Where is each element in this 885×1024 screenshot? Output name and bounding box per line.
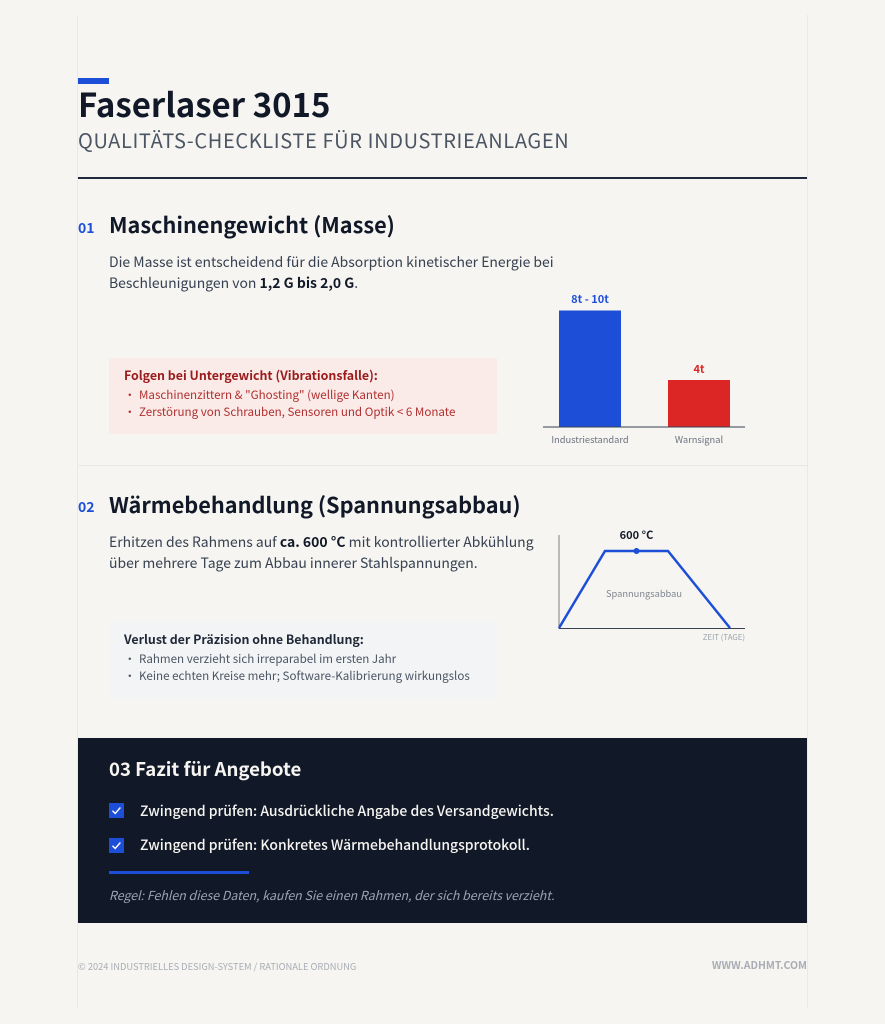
copyright: © 2024 INDUSTRIELLES DESIGN-SYSTEM / RATIONALE ORDNUNG	[78, 959, 356, 973]
item text: Zwingend prüfen: Konkretes Wärmebehandlungsprotokoll.	[140, 835, 530, 855]
callout list: Rahmen verzieht sich irreparabel im ersten Jahr	[139, 651, 396, 667]
callout list	[124, 387, 455, 420]
body text	[109, 532, 534, 573]
value label 4t: 4t	[693, 361, 705, 377]
callout list: Maschinenzittern & "Ghosting" (wellige Kanten)	[139, 387, 395, 403]
callout list: Zerstörung von Schrauben, Sensoren und Optik < 6 Monate	[139, 404, 455, 420]
icon: checkbox	[109, 803, 124, 818]
website: WWW.ADHMT.COM	[712, 958, 807, 973]
line chart: temperature profile	[558, 527, 745, 643]
body text: Die Masse ist entscheidend für die Absorption kinetischer Energie bei	[109, 252, 554, 272]
peak label: 600 °C	[620, 527, 653, 543]
rule note: Regel: Fehlen diese Daten, kaufen Sie einen Rahmen, der sich bereits verzieht.	[109, 886, 555, 904]
temperature curve	[559, 551, 730, 628]
title: Faserlaser 3015	[78, 79, 330, 127]
bar chart: machine weight	[543, 291, 745, 446]
header rule	[78, 177, 807, 179]
section number 02: 02	[78, 497, 95, 517]
body text	[109, 252, 554, 293]
body text: Erhitzen des Rahmens auf ca. 600 °C mit kontrollierter Abkühlung	[109, 532, 534, 552]
section number 01: 01	[78, 218, 95, 238]
checklist item 2	[109, 835, 530, 855]
conclusion heading: 03 Fazit für Angebote	[109, 755, 301, 782]
callout list: ・	[124, 651, 136, 667]
callout list: ・	[124, 668, 136, 684]
callout: loss of precision	[109, 621, 497, 699]
icon: checkbox	[109, 838, 124, 853]
accent bar	[78, 78, 109, 84]
callout heading: Verlust der Präzision ohne Behandlung:	[124, 630, 364, 648]
curve label: Spannungsabbau	[606, 586, 682, 600]
callout list	[124, 651, 470, 684]
panel: section 01 machine weight	[78, 205, 807, 466]
section heading: Maschinengewicht (Masse)	[109, 209, 395, 240]
axis label warning signal: Warnsignal	[675, 432, 723, 446]
item text: Zwingend prüfen: Ausdrückliche Angabe des Versandgewichts.	[140, 801, 554, 821]
footer	[78, 958, 807, 973]
bar: warning signal	[668, 380, 730, 427]
header	[78, 78, 807, 179]
callout list: Keine echten Kreise mehr; Software-Kalibrierung wirkungslos	[139, 668, 470, 684]
body text: Beschleunigungen von 1,2 G bis 2,0 G.	[109, 273, 358, 293]
callout: underweight consequences	[109, 358, 497, 434]
panel: section 02 heat treatment	[78, 488, 534, 684]
blue divider	[109, 871, 248, 874]
body text: über mehrere Tage zum Abbau innerer Stahlspannungen.	[109, 553, 478, 573]
section heading: Wärmebehandlung (Spannungsabbau)	[109, 488, 521, 520]
callout list: ・	[124, 404, 136, 420]
subtitle: QUALITÄTS-CHECKLISTE FÜR INDUSTRIEANLAGEN	[78, 125, 569, 154]
axis label: ZEIT (TAGE)	[703, 632, 745, 643]
callout list: ・	[124, 387, 136, 403]
panel: section 03 conclusion	[78, 738, 807, 923]
axis label industry standard: Industriestandard	[551, 432, 629, 446]
callout heading: Folgen bei Untergewicht (Vibrationsfalle):	[124, 366, 378, 384]
value label 8t - 10t: 8t - 10t	[571, 291, 609, 307]
peak marker	[634, 548, 640, 554]
bar: industry standard	[559, 310, 621, 427]
checklist item 1	[109, 801, 554, 821]
